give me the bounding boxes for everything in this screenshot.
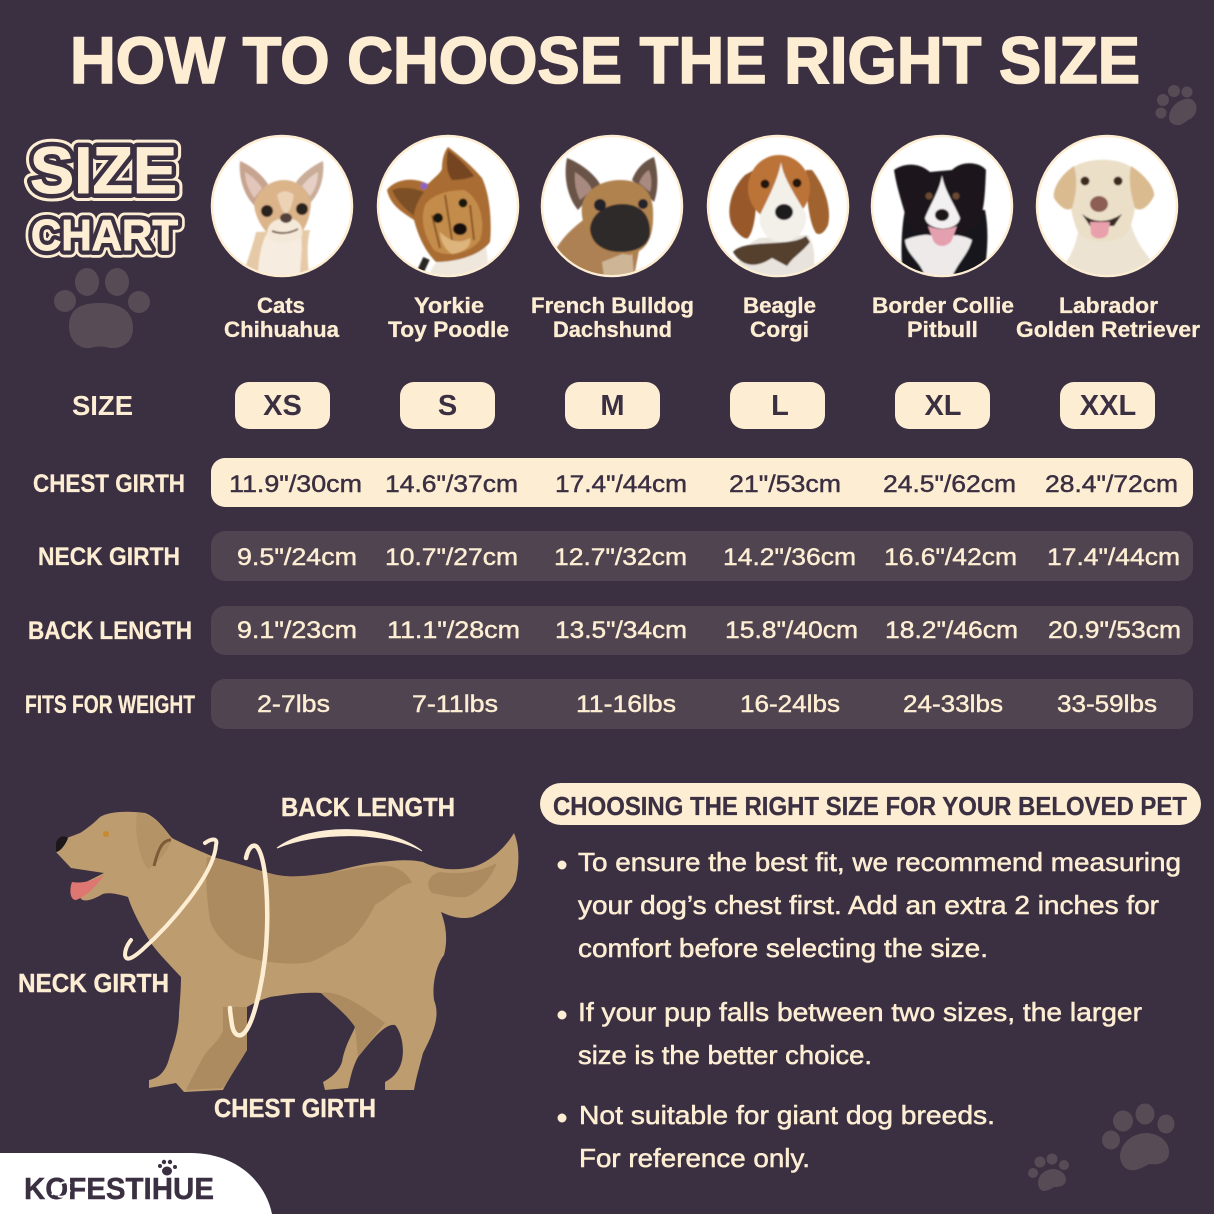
row: neck girth: 12.7"/32cm [554, 544, 687, 571]
row: back length: 11.1"/28cm [387, 617, 520, 644]
size chart badge [30, 133, 178, 260]
breed names: Dachshund [553, 317, 672, 342]
breed names: Pitbull [907, 317, 978, 342]
tip: between sizes: size is the better choice. [578, 1040, 872, 1070]
tip: between sizes [558, 997, 1142, 1070]
breed names [224, 293, 1200, 342]
icon: paw top right [1156, 85, 1197, 125]
portrait: beagle [708, 136, 848, 277]
row: back length: 15.8"/40cm [725, 617, 858, 644]
size chart badge: CHART [31, 211, 178, 260]
row: chest girth: 21"/53cm [729, 471, 841, 498]
dog measuring illustration [56, 812, 518, 1092]
tip: measure chest [558, 847, 1181, 963]
title: HOW TO CHOOSE THE RIGHT SIZE [70, 23, 1140, 97]
icon: large paw bottom right [1102, 1104, 1174, 1170]
size chart badge: SIZE [30, 133, 177, 207]
row: neck girth: NECK GIRTH [38, 543, 180, 571]
breed names: Toy Poodle [388, 317, 509, 342]
row: chest girth: 17.4"/44cm [555, 471, 687, 498]
tip: giant breeds: For reference only. [579, 1143, 810, 1173]
size row: S [438, 390, 457, 422]
breed names: Cats [257, 293, 305, 318]
portrait: yorkie [378, 136, 518, 277]
row: fits for weight: 11-16lbs [576, 691, 676, 718]
row: back length: 20.9"/53cm [1048, 617, 1181, 644]
row: neck girth [38, 531, 1193, 581]
breed names: Yorkie [414, 293, 484, 318]
tip: measure chest: comfort before selecting the size. [578, 933, 988, 963]
label: chest girth: CHEST GIRTH [214, 1093, 376, 1123]
breed names: Chihuahua [224, 317, 340, 342]
row: neck girth: 14.2"/36cm [723, 544, 856, 571]
size row: XS [263, 390, 302, 422]
size chart badge: CHART [31, 211, 178, 260]
logo panel: KOFESTIHUE [24, 1171, 214, 1206]
row: back length: 18.2"/46cm [885, 617, 1018, 644]
row: fits for weight: 33-59lbs [1057, 691, 1157, 718]
row: back length [28, 606, 1193, 655]
row: chest girth: 14.6"/37cm [385, 471, 518, 498]
row: fits for weight: 16-24lbs [740, 691, 840, 718]
row: back length: BACK LENGTH [28, 617, 192, 645]
row: chest girth: 11.9"/30cm [229, 471, 362, 498]
breed names: Corgi [750, 317, 809, 342]
row: fits for weight: 7-11lbs [412, 691, 498, 718]
tip: between sizes: If your pup falls between two sizes, the larger [578, 997, 1142, 1027]
row: neck girth: 10.7"/27cm [385, 544, 518, 571]
tip: giant breeds: Not suitable for giant dog breeds. [579, 1100, 995, 1130]
portrait: labrador [1037, 136, 1177, 277]
tip: measure chest: To ensure the best fit, we recommend measuring [578, 847, 1181, 877]
portrait: chihuahua [212, 136, 352, 277]
size chart badge: SIZE [30, 133, 177, 207]
row: back length: 9.1"/23cm [237, 617, 357, 644]
icon: small paw bottom right [1028, 1154, 1069, 1191]
size chart badge: SIZE [30, 133, 177, 207]
size chart badge: CHART [31, 211, 178, 260]
size row: M [600, 390, 625, 422]
row: fits for weight: 2-7lbs [257, 691, 330, 718]
tip: giant breeds [558, 1100, 995, 1173]
label: back length: BACK LENGTH [281, 792, 455, 822]
row: chest girth: CHEST GIRTH [33, 470, 185, 498]
label: neck girth: NECK GIRTH [18, 968, 169, 998]
row: chest girth: 24.5"/62cm [883, 471, 1016, 498]
row: neck girth: 16.6"/42cm [884, 544, 1017, 571]
portrait: french bulldog [542, 136, 682, 277]
row: fits for weight: 24-33lbs [903, 691, 1003, 718]
row: back length: 13.5"/34cm [555, 617, 687, 644]
breed names: French Bulldog [531, 293, 694, 318]
size row: L [771, 390, 789, 422]
icon: paw under badge [54, 268, 150, 348]
size row: SIZE [72, 390, 133, 421]
breed names: Labrador [1059, 293, 1158, 318]
size row: XL [924, 390, 962, 422]
size row [72, 382, 1155, 429]
row: fits for weight [25, 679, 1193, 729]
row: neck girth: 9.5"/24cm [237, 544, 357, 571]
heading banner [540, 783, 1201, 825]
tip: measure chest: your dog’s chest first. Add an extra 2 inches for [578, 890, 1159, 920]
size row: XXL [1080, 390, 1136, 422]
breed names: Border Collie [872, 293, 1014, 318]
row: fits for weight: FITS FOR WEIGHT [25, 691, 195, 719]
row: neck girth: 17.4"/44cm [1047, 544, 1180, 571]
row: chest girth: 28.4"/72cm [1045, 471, 1178, 498]
breed names: Golden Retriever [1016, 317, 1200, 342]
logo panel [0, 1153, 272, 1214]
portrait: border collie [872, 136, 1012, 277]
row: chest girth [33, 458, 1193, 507]
breed names: Beagle [743, 293, 816, 318]
